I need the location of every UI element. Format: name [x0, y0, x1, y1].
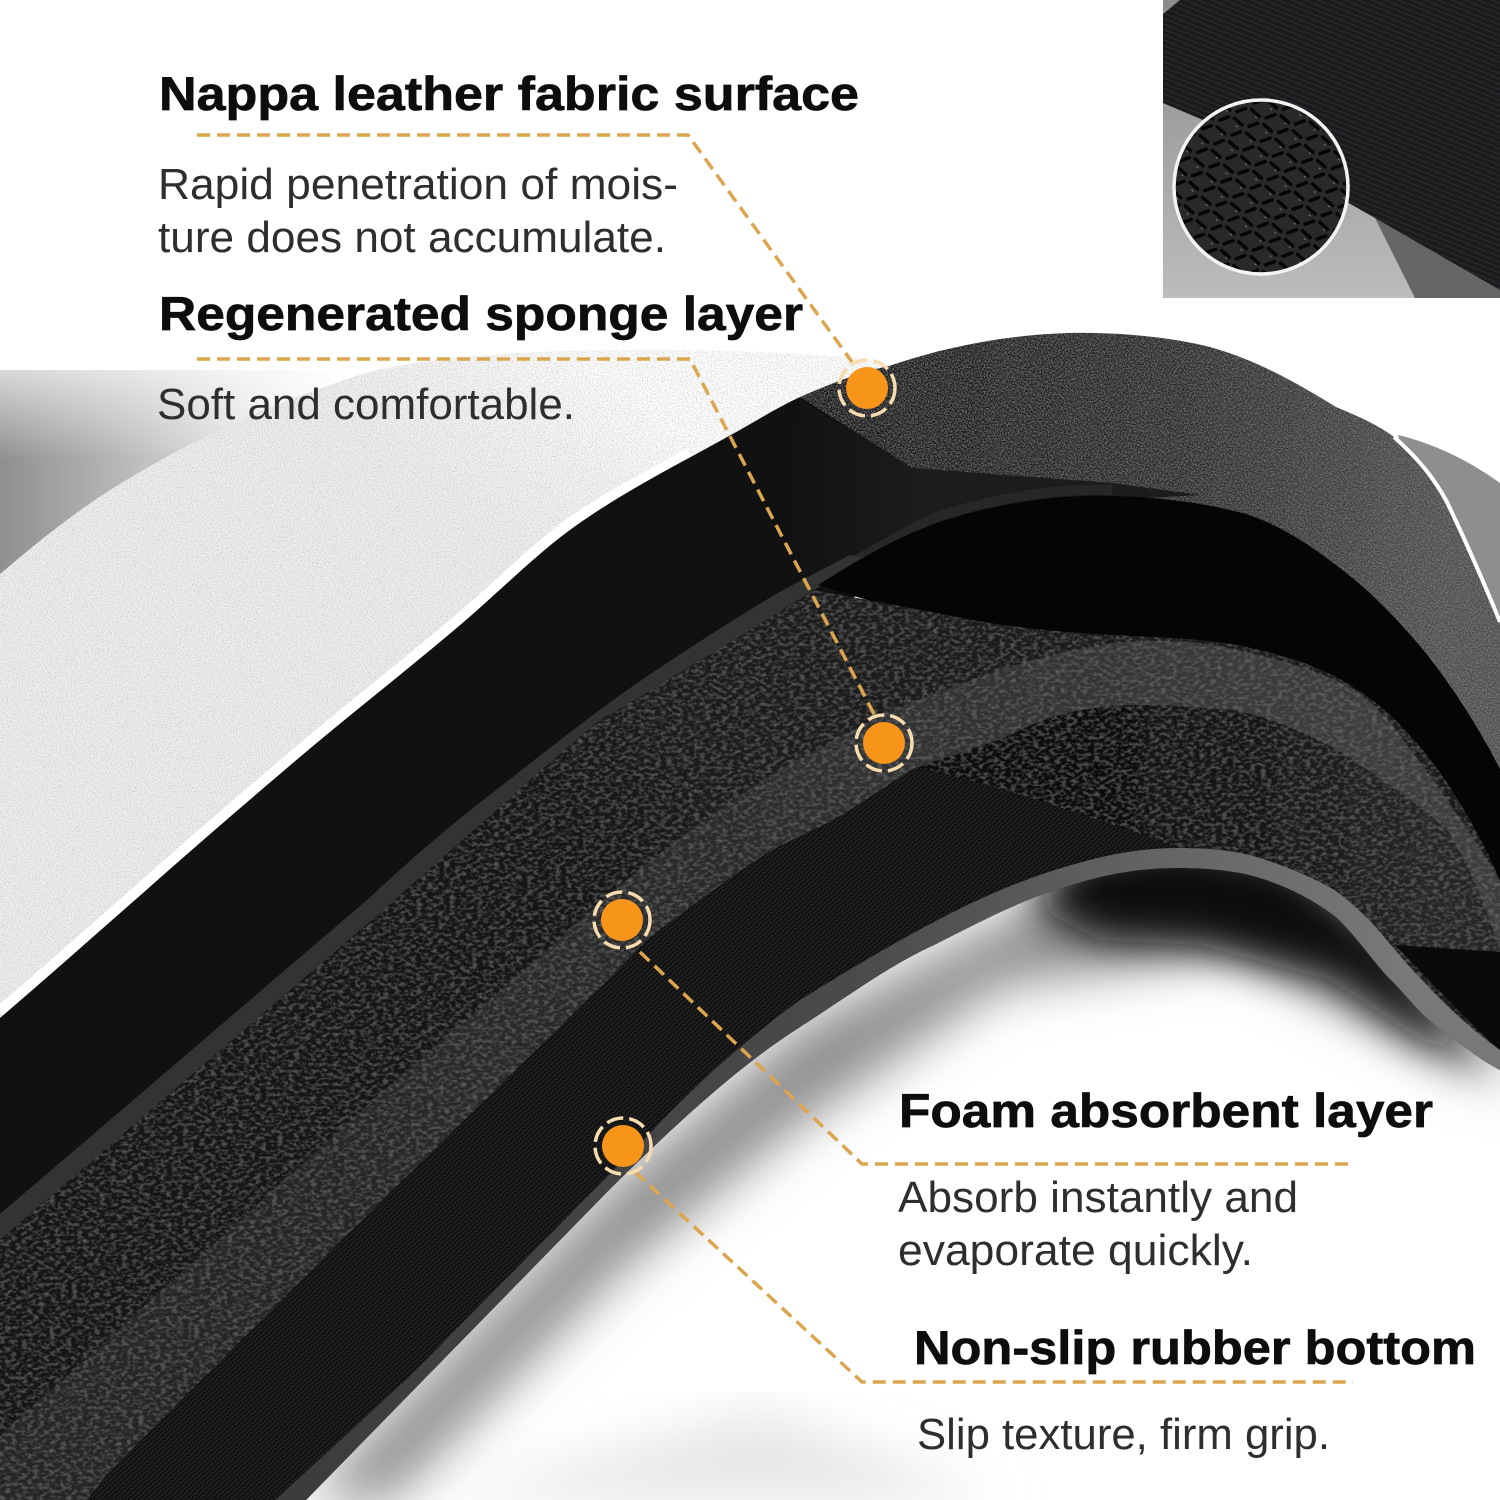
grey mat edge behind, right	[1398, 435, 1500, 640]
marker: foam layer	[594, 892, 650, 948]
inset shadow	[1375, 218, 1500, 298]
heading: Regenerated sponge layer	[159, 287, 803, 340]
heading: Foam absorbent layer	[899, 1084, 1433, 1137]
leader line	[197, 135, 852, 362]
inset floor	[1163, 0, 1415, 298]
layer: black upper layer	[0, 397, 1000, 1260]
layer: dark foam lower, right	[917, 705, 1500, 952]
layer: Nappa fabric surface	[0, 350, 889, 1018]
dark band under arch	[884, 451, 1200, 538]
white edge line on arch	[1394, 437, 1500, 622]
layer: rubber mesh bottom	[87, 767, 1200, 1500]
body text: Absorb instantly and	[898, 1173, 1298, 1222]
inset black fabric	[1163, 0, 1500, 290]
body text: Rapid penetration of mois-	[158, 160, 678, 209]
mat cross-section illustration	[0, 333, 1500, 1500]
inset: zoomed texture photo	[1163, 0, 1500, 298]
heading: Nappa leather fabric surface	[159, 67, 859, 120]
layer: grey seam strip	[0, 555, 877, 1240]
layer: nappa arch	[800, 333, 1500, 780]
layer: dark foam	[0, 590, 1500, 1500]
callout: nappa leather	[158, 67, 859, 362]
inset magnifier circle	[1174, 100, 1348, 274]
leader line	[635, 1172, 1353, 1382]
black wedge, right	[1395, 945, 1500, 1050]
soft shadow under mat	[306, 881, 1500, 1500]
body text: evaporate quickly.	[898, 1226, 1253, 1275]
leader line	[640, 952, 1353, 1164]
black inner sublayer	[818, 496, 1500, 900]
layer: lighter foam band	[0, 641, 1500, 1500]
leader line	[197, 359, 875, 716]
layer: grey bottom edge	[275, 848, 1500, 1500]
underside of mat, right	[1030, 835, 1495, 1066]
grey floor shadow, left	[0, 370, 350, 590]
white fabric trim line	[0, 454, 690, 1012]
marker: rubber bottom	[595, 1118, 651, 1174]
callout: rubber bottom	[635, 1172, 1476, 1459]
heading: Non-slip rubber bottom	[914, 1321, 1476, 1374]
body text: Slip texture, firm grip.	[917, 1410, 1330, 1459]
marker: nappa surface	[839, 360, 895, 416]
body text: ture does not accumulate.	[158, 213, 666, 262]
callout: foam layer	[640, 952, 1433, 1275]
callout: sponge layer	[157, 287, 875, 716]
lighter rim above inner sublayer	[854, 485, 1112, 558]
mat layers, clipped to mat outline	[0, 333, 1500, 1500]
marker: sponge layer	[856, 715, 912, 771]
body text: Soft and comfortable.	[157, 380, 575, 429]
